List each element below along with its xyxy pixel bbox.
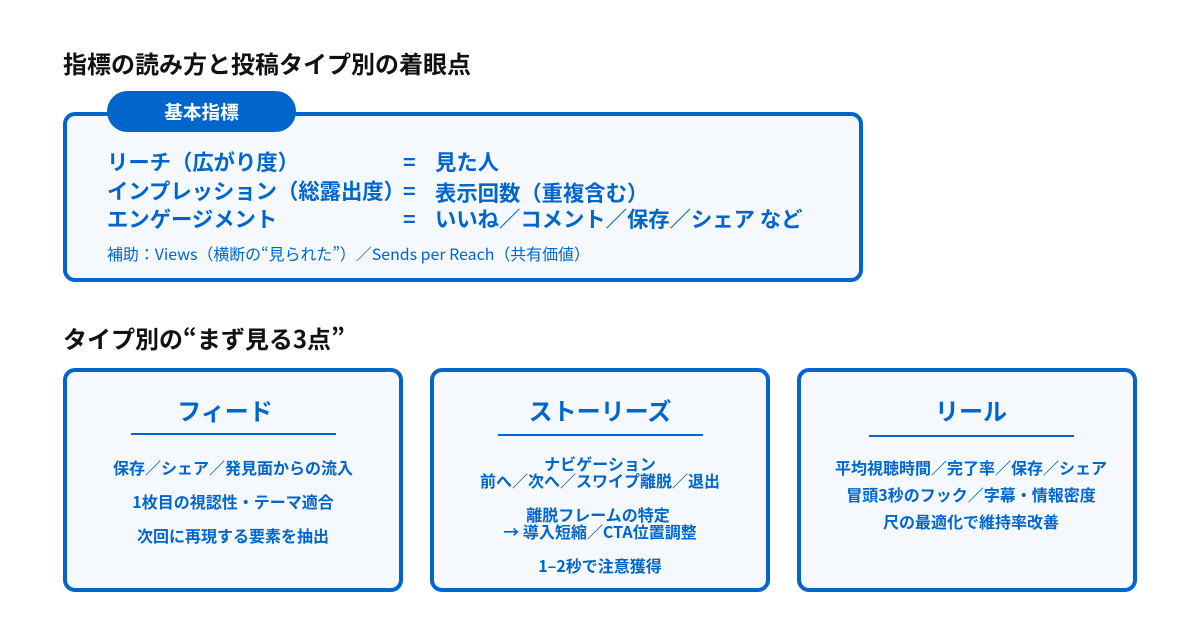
equals sign: reach: = bbox=[403, 146, 416, 177]
metric: engagement definition: いいね／コメント／保存／シェア など bbox=[435, 203, 802, 234]
reels item 1: 平均視聴時間／完了率／保存／シェア bbox=[835, 455, 1107, 479]
equals sign: impressions: = bbox=[403, 175, 416, 206]
card title: reels: リール bbox=[935, 392, 1007, 427]
metric: engagement label: エンゲージメント bbox=[107, 203, 277, 234]
section heading: タイプ別の“まず見る3点” bbox=[63, 320, 345, 355]
card title: stories: ストーリーズ bbox=[529, 392, 671, 427]
stories item 2 bbox=[503, 502, 697, 543]
stories item 3: 1–2秒で注意獲得 bbox=[538, 553, 662, 577]
metric: impressions label: インプレッション（総露出度） bbox=[107, 175, 405, 206]
reels item 2: 冒頭3秒のフック／字幕・情報密度 bbox=[846, 482, 1096, 506]
badge: basic metrics: 基本指標 bbox=[164, 98, 239, 125]
feed item 1: 保存／シェア／発見面からの流入 bbox=[113, 455, 353, 479]
divider: stories bbox=[498, 434, 703, 436]
reels item 3: 尺の最適化で維持率改善 bbox=[883, 509, 1059, 533]
metric: impressions definition: 表示回数（重複含む） bbox=[435, 177, 648, 208]
badge: basic metrics bbox=[107, 91, 296, 132]
title: 指標の読み方と投稿タイプ別の着眼点 bbox=[63, 45, 471, 80]
stories item 2: 離脱フレームの特定 bbox=[526, 502, 670, 526]
panel: reels bbox=[797, 368, 1137, 592]
panel: stories bbox=[430, 368, 770, 592]
metric: reach label: リーチ（広がり度） bbox=[107, 146, 299, 177]
metric: reach definition: 見た人 bbox=[435, 146, 499, 177]
divider: feed bbox=[131, 433, 336, 435]
panel: feed bbox=[63, 368, 403, 592]
equals sign: engagement: = bbox=[403, 203, 416, 234]
feed item 3: 次回に再現する要素を抽出 bbox=[137, 523, 329, 547]
divider: reels bbox=[869, 435, 1074, 437]
stories item 1: 前へ／次へ／スワイプ離脱／退出 bbox=[480, 468, 720, 492]
stories item 1 bbox=[480, 451, 720, 492]
feed item 2: 1枚目の視認性・テーマ適合 bbox=[132, 489, 334, 513]
card title: feed: フィード bbox=[177, 392, 273, 427]
stories item 2: → 導入短縮／CTA位置調整 bbox=[503, 519, 697, 543]
note: supplementary metrics: 補助：Views（横断の“見られた”）／Sends per Reach（共有価値） bbox=[107, 242, 590, 265]
stories item 1: ナビゲーション bbox=[544, 451, 656, 475]
panel: basic metrics bbox=[63, 112, 863, 282]
